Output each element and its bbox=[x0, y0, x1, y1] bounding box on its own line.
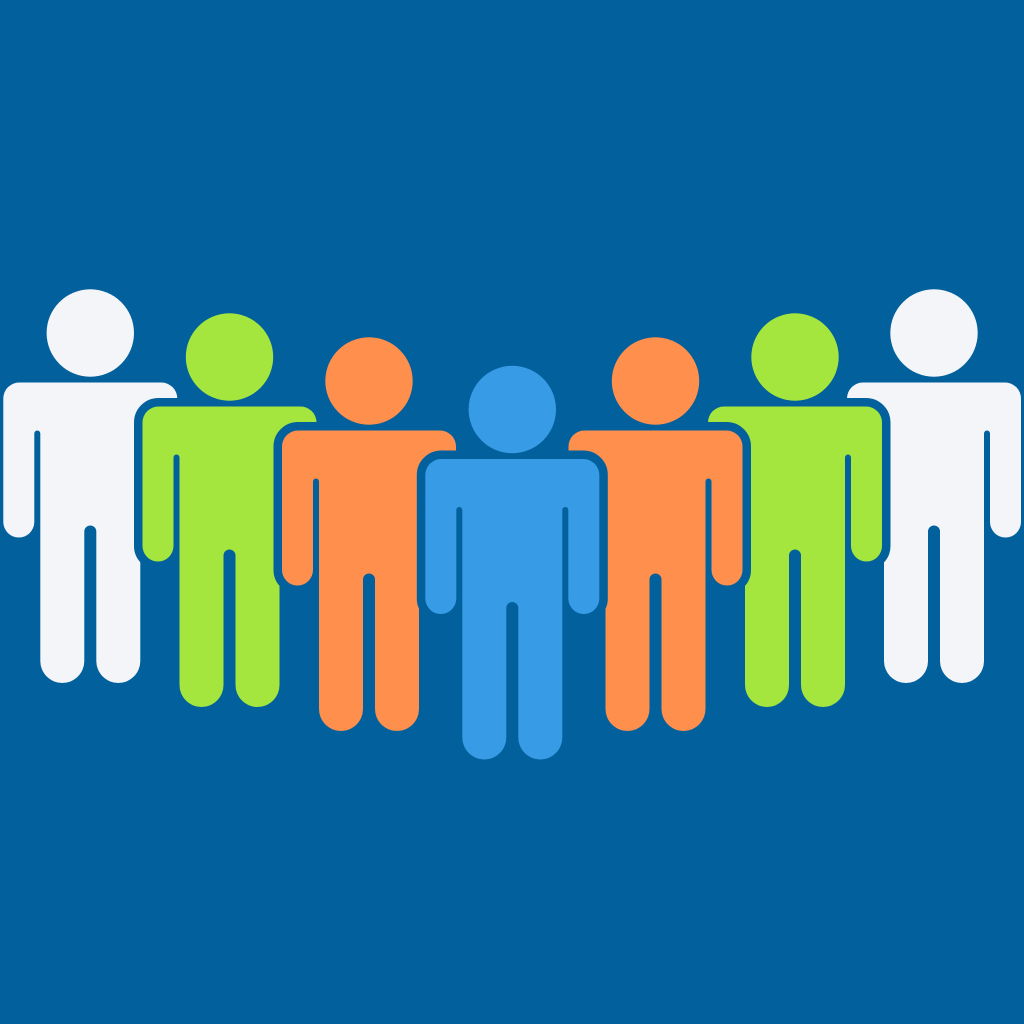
person: orange figure right bbox=[568, 337, 742, 731]
person: white figure far left bbox=[3, 289, 177, 683]
person: orange figure left bbox=[282, 337, 456, 731]
person: green figure right bbox=[708, 313, 882, 707]
person: blue figure centre front bbox=[425, 366, 599, 760]
person: green figure left bbox=[142, 313, 316, 707]
person: white figure far right bbox=[847, 289, 1021, 683]
